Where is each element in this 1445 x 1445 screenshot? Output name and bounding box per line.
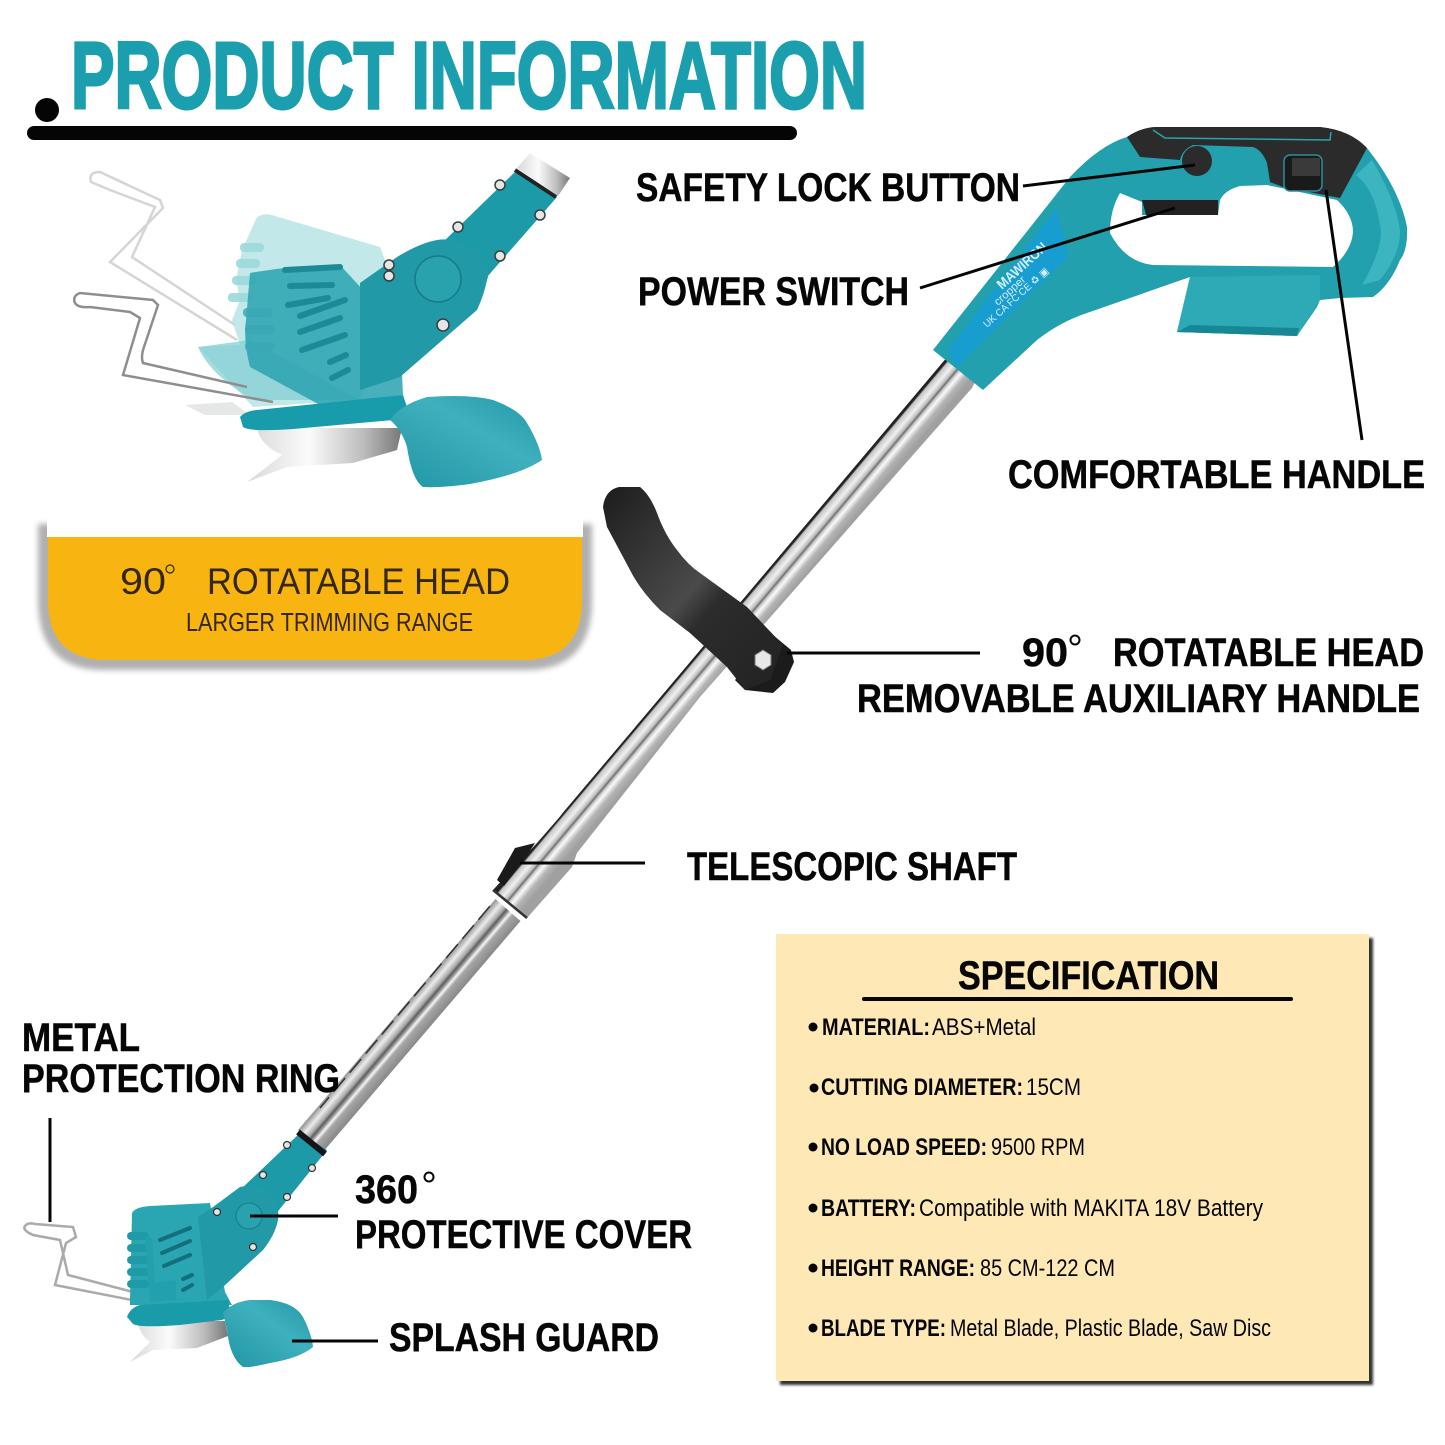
silver ring	[517, 153, 570, 196]
splash guard	[223, 1300, 313, 1367]
screws	[384, 180, 545, 331]
callout: removable auxiliary handle	[787, 631, 1424, 721]
trigger	[1284, 155, 1322, 191]
callout: power switch: POWER SWITCH	[638, 270, 909, 314]
spec: height range	[808, 1255, 1115, 1282]
blue label: UK CA FC CE ♻ ▣	[982, 266, 1051, 330]
yellow banner: rotatable head	[38, 500, 592, 670]
black grip	[1127, 127, 1367, 198]
callout: splash guard: SPLASH GUARD	[389, 1316, 659, 1360]
collar ring	[493, 890, 527, 918]
spec: material: MATERIAL:	[822, 1014, 930, 1041]
spec: no load speed: 9500 RPM	[991, 1134, 1085, 1161]
callout: safety lock button: SAFETY LOCK BUTTON	[636, 166, 1020, 210]
blue label: cropper	[992, 274, 1029, 308]
main housing	[245, 265, 403, 405]
auxiliary handle	[603, 487, 794, 693]
panel: specification	[776, 934, 1373, 1385]
spec: battery: BATTERY:	[821, 1195, 916, 1222]
spec: blade type: BLADE TYPE:	[821, 1315, 946, 1342]
spec: blade type	[808, 1315, 1271, 1342]
callout: protective cover: PROTECTIVE COVER	[355, 1213, 692, 1257]
spec: height range: HEIGHT RANGE:	[821, 1255, 975, 1282]
vents	[285, 267, 348, 378]
spec: no load speed: NO LOAD SPEED:	[821, 1134, 987, 1161]
yellow banner: rotatable head: 90	[120, 561, 166, 602]
power switch	[1142, 200, 1218, 215]
trimmer head bottom	[24, 1132, 327, 1367]
callout: power switch	[638, 208, 1175, 314]
rotating trimmer head illustration	[74, 153, 570, 487]
blue label	[948, 208, 1068, 367]
base ring	[127, 1300, 230, 1326]
yellow banner: rotatable head: ROTATABLE HEAD	[207, 561, 510, 602]
specification heading: SPECIFICATION	[958, 954, 1219, 998]
specification heading	[862, 954, 1293, 1001]
callout: metal protection ring: METAL	[22, 1016, 140, 1060]
metal disc and blade	[247, 428, 402, 482]
screws	[214, 1142, 316, 1250]
title: PRODUCT INFORMATION	[71, 23, 867, 129]
highlight on handle back	[1356, 160, 1400, 285]
spec: blade type: Metal Blade, Plastic Blade, Saw Disc	[950, 1315, 1271, 1342]
fins	[243, 308, 275, 351]
callout: protective cover: 360	[355, 1168, 418, 1212]
battery mount	[1177, 275, 1320, 336]
faint lower disc	[185, 402, 250, 415]
pivot	[198, 1186, 278, 1300]
ghost guard wires	[90, 172, 237, 340]
guard wire	[24, 1223, 147, 1303]
ghost fins	[228, 243, 264, 302]
neck	[440, 170, 557, 285]
black ring	[298, 1132, 325, 1154]
title	[27, 23, 867, 140]
spec: cutting diameter: CUTTING DIAMETER:	[821, 1074, 1023, 1101]
safety button	[1182, 146, 1212, 176]
neck	[240, 1133, 327, 1215]
ghost housing	[198, 214, 400, 407]
main handle	[933, 127, 1407, 390]
spec: cutting diameter: 15CM	[1026, 1074, 1081, 1101]
callout: comfortable handle	[1008, 190, 1425, 497]
solid guard wire	[74, 293, 273, 402]
telescopic shaft	[298, 356, 985, 1152]
callout: metal protection ring: PROTECTION RING	[22, 1057, 340, 1101]
fins	[127, 1232, 149, 1288]
vents	[160, 1228, 192, 1290]
pivot plate	[360, 239, 488, 390]
callout: protective cover	[250, 1168, 692, 1257]
metal disc and blade	[130, 1321, 228, 1362]
spec: battery	[808, 1195, 1263, 1222]
yellow banner: rotatable head: LARGER TRIMMING RANGE	[186, 607, 473, 637]
blue label: MAWIRON	[993, 239, 1050, 292]
base ring	[240, 395, 407, 430]
cylinder	[130, 1203, 232, 1305]
spec: material	[808, 1014, 1036, 1041]
spec: height range: 85 CM-122 CM	[980, 1255, 1115, 1282]
spec: material: ABS+Metal	[932, 1014, 1036, 1041]
callout: metal protection ring	[22, 1016, 340, 1222]
callout: telescopic shaft: TELESCOPIC SHAFT	[687, 845, 1017, 889]
clamp tab	[497, 843, 535, 886]
splash guard	[390, 396, 542, 487]
callout: removable auxiliary handle: 90	[1022, 631, 1068, 675]
spec: battery: Compatible with MAKITA 18V Battery	[919, 1195, 1263, 1222]
